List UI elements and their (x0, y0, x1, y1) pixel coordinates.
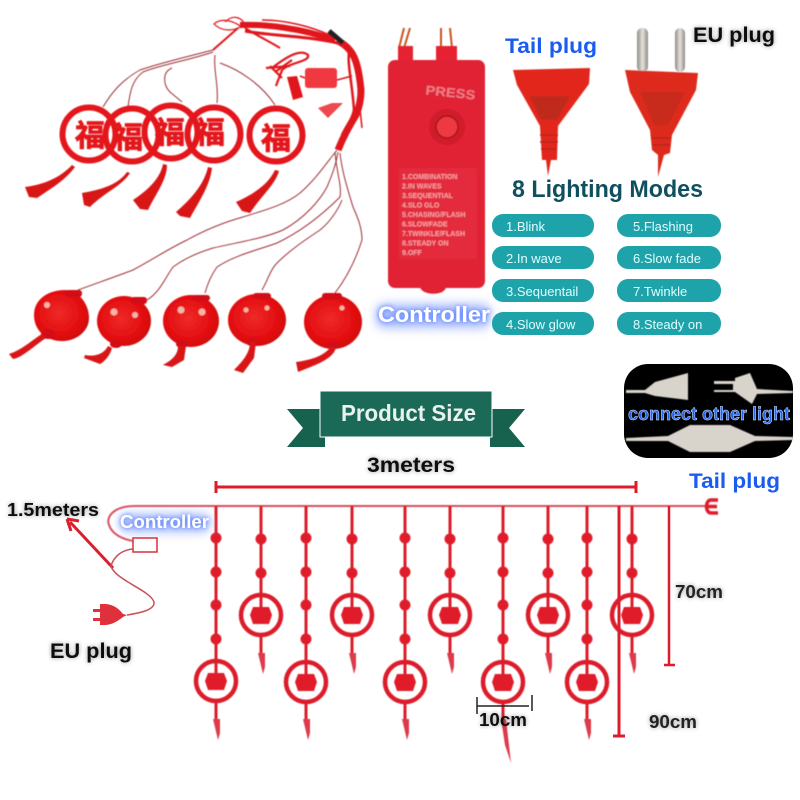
icon: inline controller (133, 538, 157, 552)
lanterns (34, 290, 362, 349)
rings with fu characters (62, 106, 302, 162)
dimension bar: 3 meters (216, 481, 636, 493)
icon: red EU plug (625, 28, 698, 177)
pill 5: 5.Flashing (633, 219, 693, 234)
pill 3: 3.Sequentail (506, 284, 578, 299)
ring ornaments (196, 595, 652, 702)
mode pills (492, 214, 721, 335)
pill 6: 6.Slow fade (633, 251, 701, 266)
pill 3 (492, 279, 594, 302)
glow patch: controller diagram (120, 514, 210, 532)
pill 6 (617, 246, 721, 269)
printed modes list: 2.IN WAVES (402, 184, 442, 190)
lantern caps and highlights (41, 290, 344, 349)
dimension bar: 90cm (613, 506, 625, 736)
strands (216, 506, 632, 720)
arrow: 1.5 meters (67, 519, 113, 568)
ring tassels (25, 164, 279, 218)
pill 7: 7.Twinkle (633, 284, 687, 299)
controller body (388, 60, 485, 288)
label: 70cm: 70cm (675, 582, 723, 602)
wire bundle (213, 17, 362, 150)
tassel tips (213, 653, 636, 763)
printed modes list: 8.STEADY ON (402, 240, 449, 248)
printed modes list: 6.SLOWFADE (402, 222, 448, 228)
label: 90cm: 90cm (649, 712, 697, 732)
beads (210, 532, 638, 644)
product photo: lights set (9, 17, 362, 373)
fu characters: 福 (75, 120, 105, 153)
fu characters: 福 (261, 123, 291, 156)
label: tail plug top: Tail plug (505, 35, 597, 58)
light curtain diagram (108, 500, 718, 763)
banner: product size (287, 391, 525, 447)
dimension bar: 70cm (664, 506, 675, 665)
connect label: connect other light (628, 404, 790, 424)
pill 2 (492, 246, 594, 269)
printed modes list: 4.SLO GLO (402, 202, 440, 210)
label: EU plug diagram: EU plug (50, 640, 132, 663)
heading: 8 lighting modes: 8 Lighting Modes (512, 176, 703, 203)
label: controller diagram: Controller (120, 512, 209, 532)
controller connectors (398, 46, 457, 60)
label: EU plug top: EU plug (693, 24, 775, 47)
lantern tassels (9, 334, 336, 373)
lantern centers (205, 607, 643, 691)
label: controller top: Controller (378, 302, 490, 327)
banner: product size: Product Size (341, 400, 476, 426)
label: 10cm: 10cm (479, 710, 527, 730)
controller wires (399, 28, 452, 48)
cord to EU plug (111, 549, 154, 615)
pill 4 (492, 312, 594, 335)
printed modes list: 9.OFF (402, 250, 423, 257)
main cable (108, 506, 707, 541)
pill 8: 8.Steady on (633, 317, 702, 332)
printed modes list: 5.CHASING/FLASH (402, 212, 465, 219)
panel: connect other light (624, 364, 793, 458)
pill 5 (617, 214, 721, 237)
modes panel (399, 168, 477, 259)
cable tie (329, 31, 343, 43)
clear plugs (626, 373, 793, 452)
thin wires to rings and lanterns (78, 50, 362, 300)
fu characters: 福 (155, 117, 185, 150)
printed modes list: 3.SEQUENTIAL (402, 193, 454, 200)
pill 1: 1.Blink (506, 219, 546, 234)
pill 4: 4.Slow glow (506, 317, 576, 332)
press label: PRESS (425, 82, 476, 103)
label: tail plug bottom: Tail plug (689, 470, 780, 493)
glow patch: controller top (376, 304, 490, 328)
icon: EU plug diagram (93, 604, 127, 625)
printed modes list: 7.TWINKLE/FLASH (402, 231, 465, 238)
printed modes list: 1.COMBINATION (402, 174, 457, 181)
press button (429, 109, 465, 145)
bottom tab (420, 287, 446, 294)
label: 3 meters: 3meters (367, 454, 455, 477)
pill 7 (617, 279, 721, 302)
icon: red tail plug (513, 68, 590, 176)
small controller and cable (266, 53, 352, 118)
fu characters (75, 117, 291, 156)
pill 1 (492, 214, 594, 237)
fu characters: 福 (195, 117, 225, 150)
fu characters: 福 (113, 122, 143, 155)
dimension bar: 10cm (477, 695, 532, 714)
end connector (706, 500, 718, 513)
label: 1.5 meters: 1.5meters (7, 500, 99, 520)
pill 2: 2.In wave (506, 251, 562, 266)
pill 8 (617, 312, 721, 335)
controller photo (388, 28, 485, 294)
printed modes list (402, 174, 465, 257)
